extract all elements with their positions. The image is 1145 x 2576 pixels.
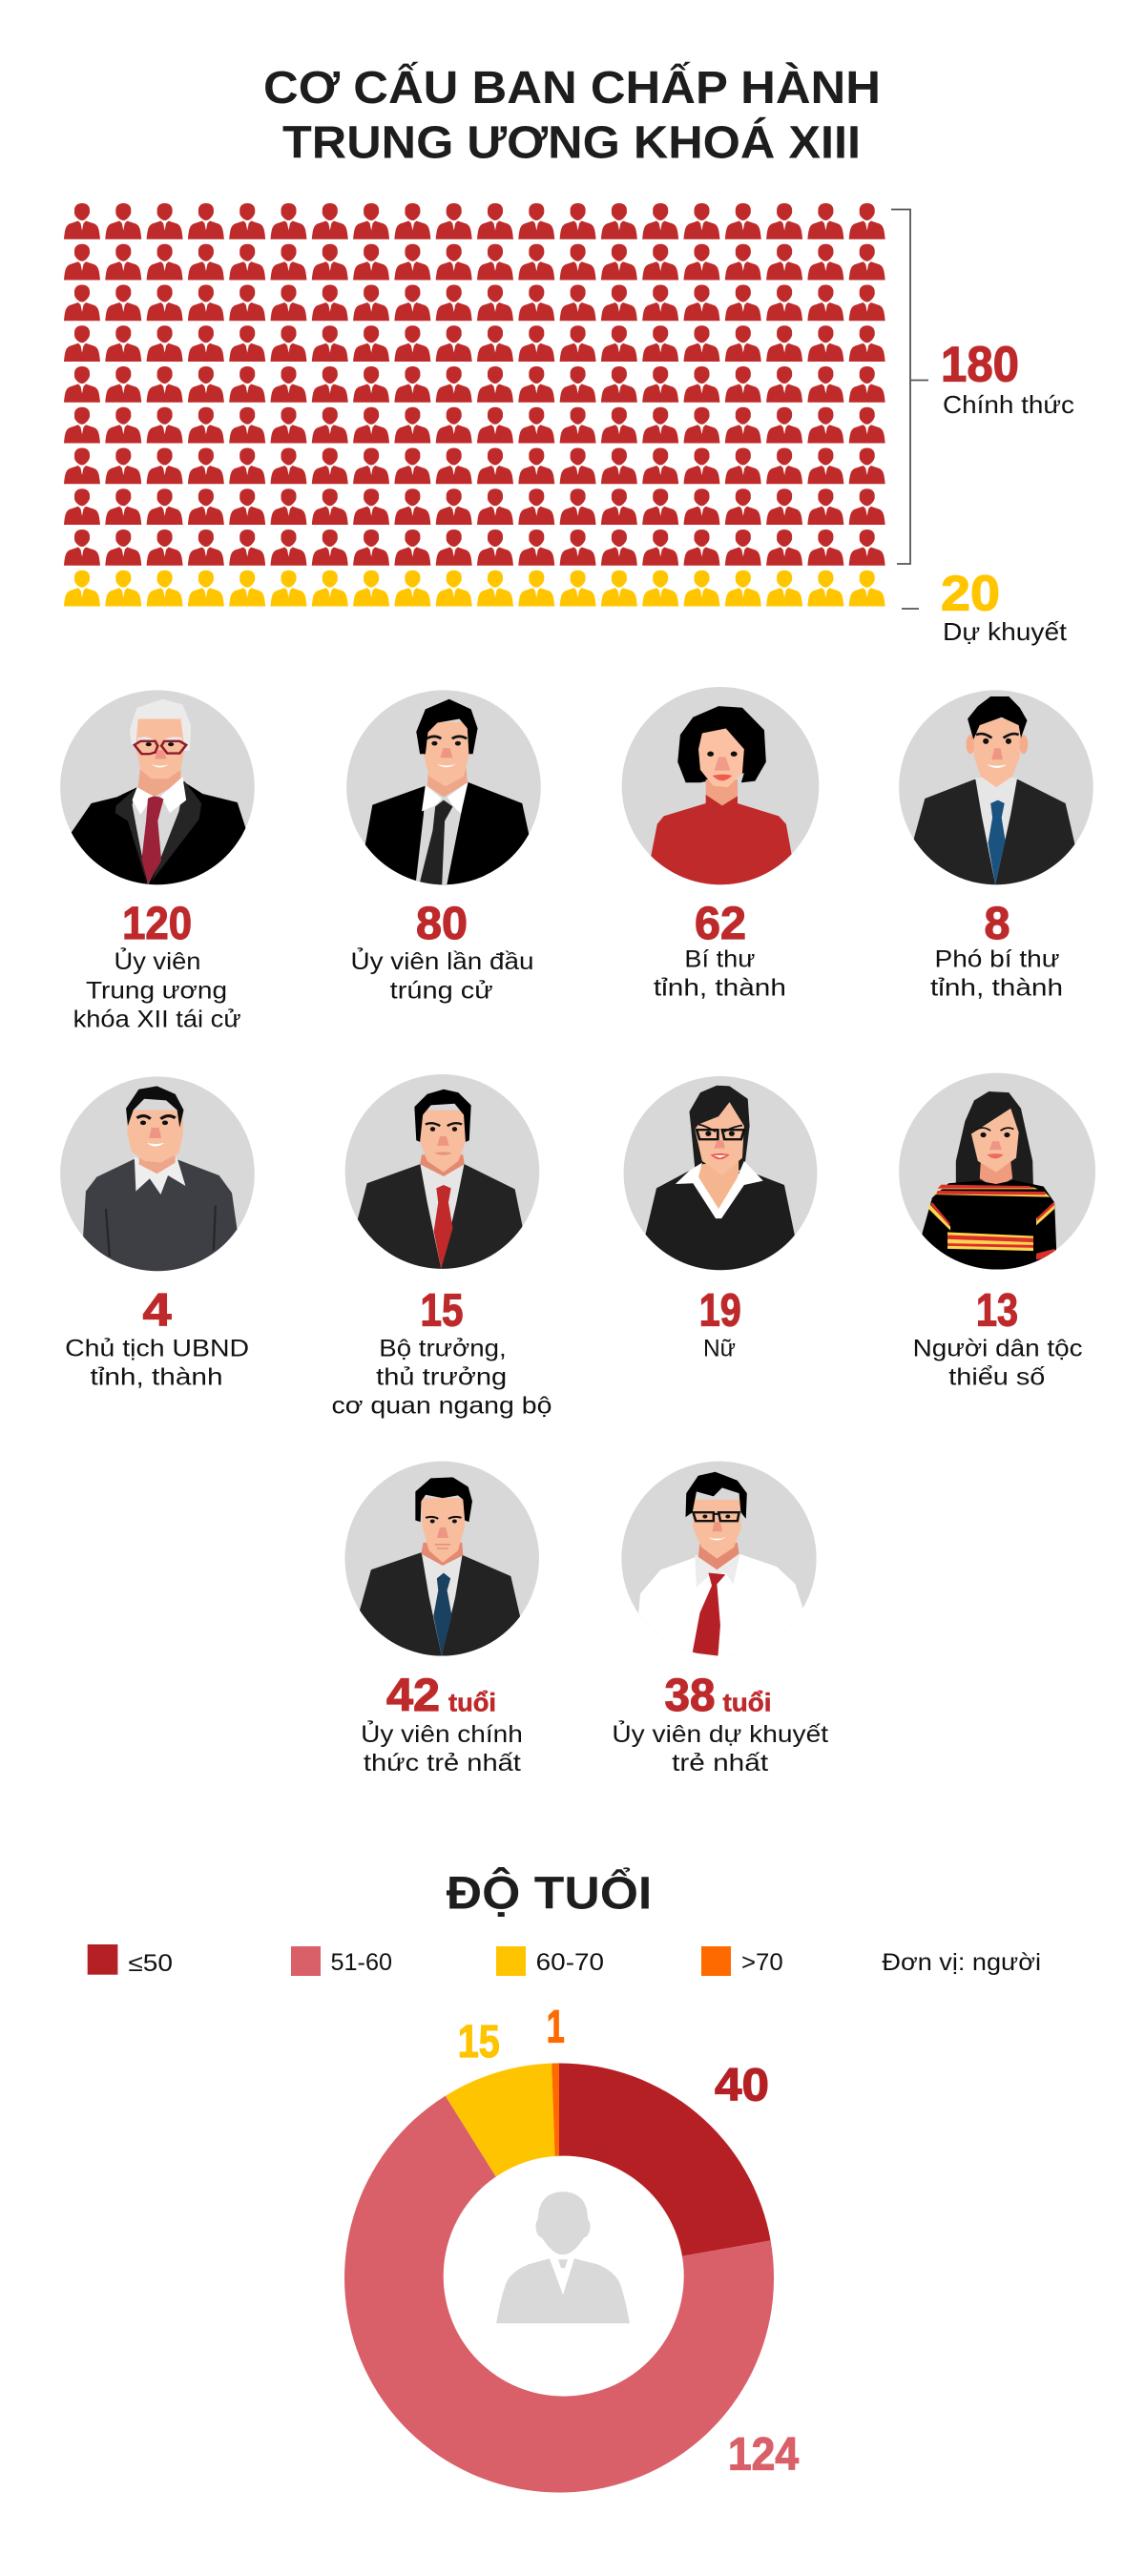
portrait: man with blue tie [899,690,1093,907]
stat: 13 ethnic minority: 13 [976,1286,1018,1336]
stat: 42 years old: 42 [386,1671,440,1721]
portrait: youngest alternate member [622,1462,817,1656]
title: TRUNG ƯƠNG KHOÁ XIII [282,116,861,168]
stat: 38 years old: trẻ nhất [672,1750,768,1776]
stat: 19 women [699,1286,741,1361]
stat: 13 ethnic minority [913,1286,1083,1391]
stat: 20 alternate: Dự khuyết [943,617,1068,646]
pictogram: 20 alternate members [64,571,885,607]
stat: 19 women: Nữ [703,1335,736,1361]
legend: 60-70 [536,1949,604,1976]
stat: 15 ministers: cơ quan ngang bộ [332,1393,552,1420]
legend: Đơn vị: người [882,1949,1041,1976]
stat: 38 years old: tuổi [723,1688,771,1716]
stat: 42 years old: Ủy viên chính [361,1719,523,1748]
stat: 120 re-elected: Trung ương [86,977,227,1004]
stat: 15 ministers: 15 [420,1286,464,1336]
stat: 4 provincial chairs: 4 [143,1286,172,1336]
title [263,62,881,168]
stat: 62 provincial secretaries: tỉnh, thành [654,975,786,1002]
stat: 42 years old: tuổi [448,1688,496,1716]
stat: 62 provincial secretaries: Bí thư [684,946,755,973]
portrait: woman in red ao dai [622,687,819,907]
title: CƠ CẤU BAN CHẤP HÀNH [263,62,881,114]
stat: 180 official [941,338,1074,419]
legend [88,1944,1041,1977]
stat: 19 women: 19 [699,1286,741,1336]
portrait: woman with glasses [624,1076,817,1271]
stat: 4 provincial chairs: Chủ tịch UBND [65,1335,249,1361]
stat: 120 re-elected: 120 [122,899,192,949]
value label: 1: 1 [547,2002,565,2053]
stat: 120 re-elected [73,899,241,1033]
stat: 8 deputy secretaries: Phó bí thư [935,946,1059,973]
stat: 38 years old [612,1671,828,1776]
heading: age: ĐỘ TUỔI [447,1866,652,1920]
stat: 80 first-time: 80 [416,899,468,949]
stat: 180 official: Chính thức [943,390,1074,419]
stat: 80 first-time: Ủy viên lần đầu [351,946,534,975]
stat: 15 ministers: thủ trưởng [376,1364,507,1391]
stat: 80 first-time [351,899,534,1004]
stat: 8 deputy secretaries: 8 [985,899,1010,949]
stat: 62 provincial secretaries: 62 [695,899,746,949]
bracket: official members [891,210,928,564]
stat: 38 years old: Ủy viên dự khuyết [612,1719,828,1748]
value label: 124: 124 [728,2429,799,2481]
tick: alternate members [902,608,919,610]
stat: 120 re-elected: khóa XII tái cử [73,1007,241,1033]
stat: 180 official: 180 [941,338,1019,393]
stat: 13 ethnic minority: thiểu số [948,1364,1045,1391]
portrait: man in grey sweater [60,1076,255,1271]
stat: 38 years old: 38 [664,1671,716,1721]
stat: 4 provincial chairs [65,1286,249,1391]
legend: 51-60 [330,1949,392,1976]
portrait: first-time member [346,690,541,885]
legend: ≤50 [128,1950,173,1977]
stat: 8 deputy secretaries: tỉnh, thành [930,975,1063,1002]
stat: 42 years old: thức trẻ nhất [364,1750,521,1776]
stat: 20 alternate: 20 [941,567,1000,622]
donut chart: age groups [344,2063,774,2493]
pictogram: 180 official members [64,203,885,566]
portrait: youngest official member [345,1462,539,1656]
stat: 42 years old [361,1671,523,1776]
stat: 15 ministers [332,1286,552,1420]
portrait: ethnic minority woman in striped top [899,1072,1095,1269]
stat: 8 deputy secretaries [930,899,1063,1002]
stat: 15 ministers: Bộ trưởng, [379,1335,507,1361]
stat: 20 alternate [941,567,1068,646]
value label: 15: 15 [458,2017,500,2067]
stat: 80 first-time: trúng cử [390,977,493,1004]
portrait: man with red tie [345,1074,540,1269]
legend: >70 [741,1949,783,1976]
stat: 120 re-elected: Ủy viên [114,946,200,975]
stat: 13 ethnic minority: Người dân tộc [913,1335,1083,1361]
stat: 4 provincial chairs: tỉnh, thành [90,1364,223,1391]
icon: grey person in donut centre [496,2192,630,2323]
value label: 40: 40 [715,2061,769,2110]
stat: 62 provincial secretaries [654,899,786,1002]
portrait: re-elected member, white hair and red glasses [60,690,255,885]
